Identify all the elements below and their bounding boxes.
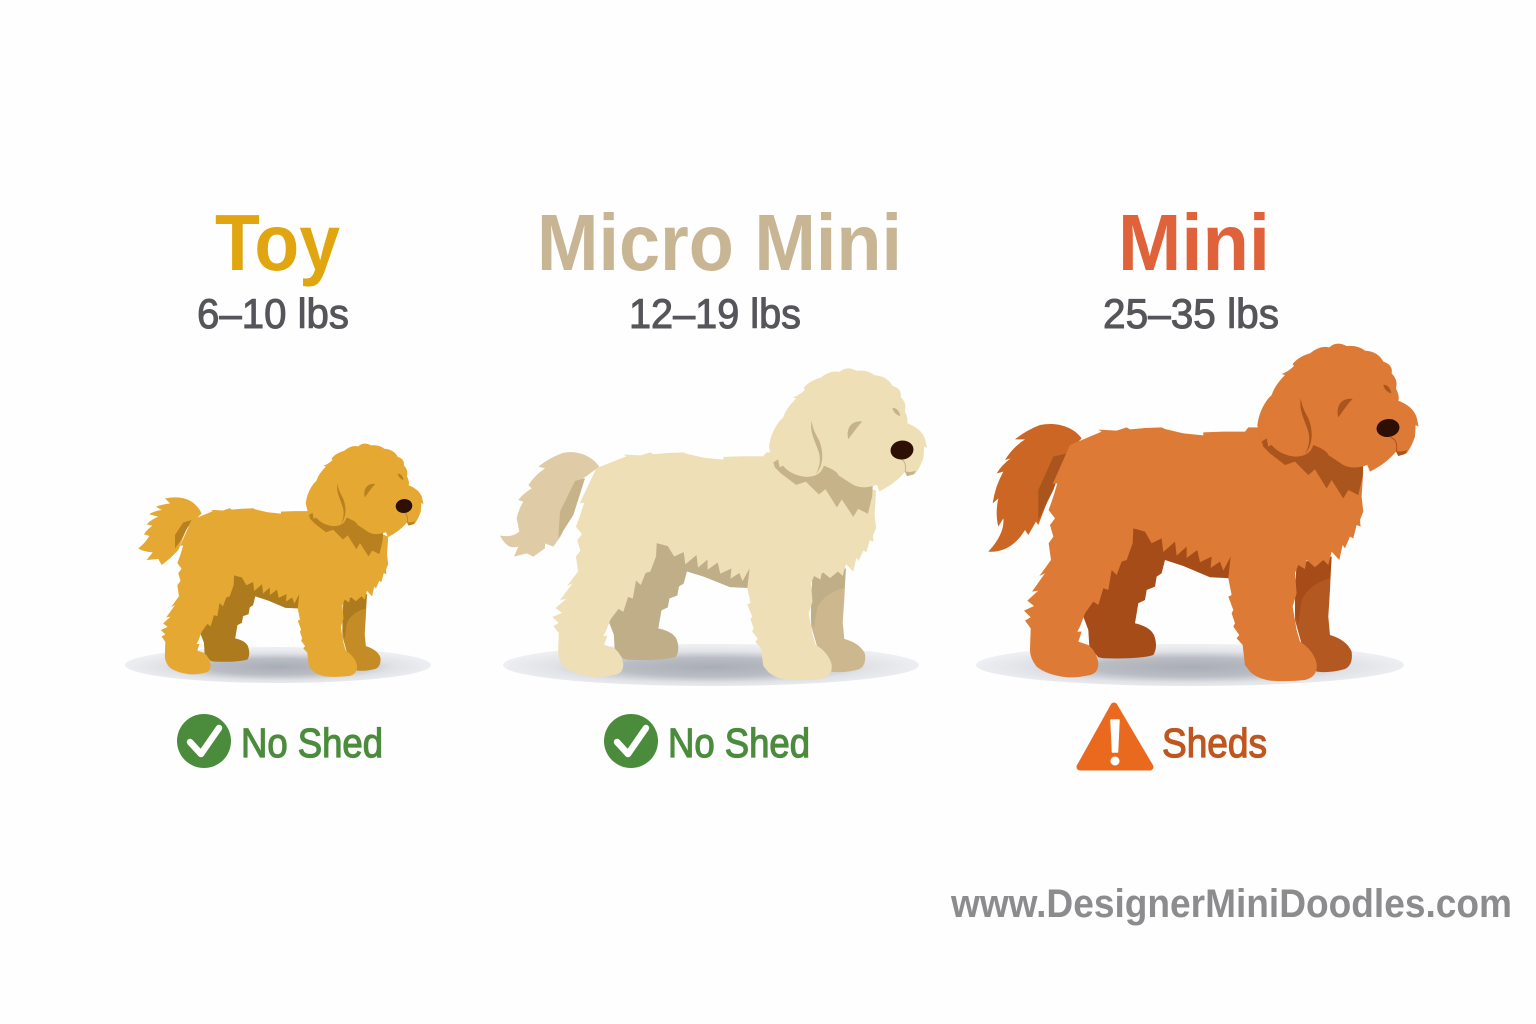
micro mini nose bbox=[889, 439, 915, 461]
icon: warning triangle bbox=[1080, 706, 1150, 767]
dog: toy bbox=[138, 444, 423, 677]
ground shadow: mini bbox=[976, 644, 1404, 686]
toy head bbox=[306, 444, 423, 557]
dog: micro mini bbox=[500, 368, 927, 680]
title: Toy: Toy bbox=[215, 198, 340, 287]
mini head bbox=[1257, 344, 1419, 498]
micro mini tail bbox=[500, 452, 599, 557]
mini nose bbox=[1375, 417, 1401, 439]
mini tail bbox=[988, 424, 1082, 552]
title: Mini: Mini bbox=[1118, 198, 1270, 287]
label: no shed: No Shed bbox=[241, 720, 383, 766]
weight: 12-19 lbs: 12–19 lbs bbox=[629, 290, 801, 337]
label: no shed: No Shed bbox=[668, 720, 810, 766]
badge: mini sheds bbox=[1080, 706, 1267, 767]
toy body bbox=[161, 508, 388, 677]
badge: toy no shed bbox=[177, 714, 383, 768]
weight: 6-10 lbs: 6–10 lbs bbox=[197, 290, 349, 337]
ground shadow: toy bbox=[125, 647, 431, 683]
dog: mini bbox=[988, 344, 1419, 681]
icon: check micro mini bbox=[604, 714, 658, 768]
weight: 25-35 lbs: 25–35 lbs bbox=[1103, 290, 1279, 337]
title: Micro Mini: Micro Mini bbox=[537, 198, 902, 287]
ground shadow: micro mini bbox=[503, 644, 919, 686]
toy nose bbox=[395, 498, 413, 514]
mini body bbox=[1024, 427, 1363, 681]
toy tail bbox=[138, 497, 202, 565]
icon: check toy bbox=[177, 714, 231, 768]
micro mini body bbox=[552, 452, 876, 680]
badge: micro mini no shed bbox=[604, 714, 810, 768]
label: sheds: Sheds bbox=[1162, 720, 1267, 766]
micro mini head bbox=[769, 368, 927, 517]
